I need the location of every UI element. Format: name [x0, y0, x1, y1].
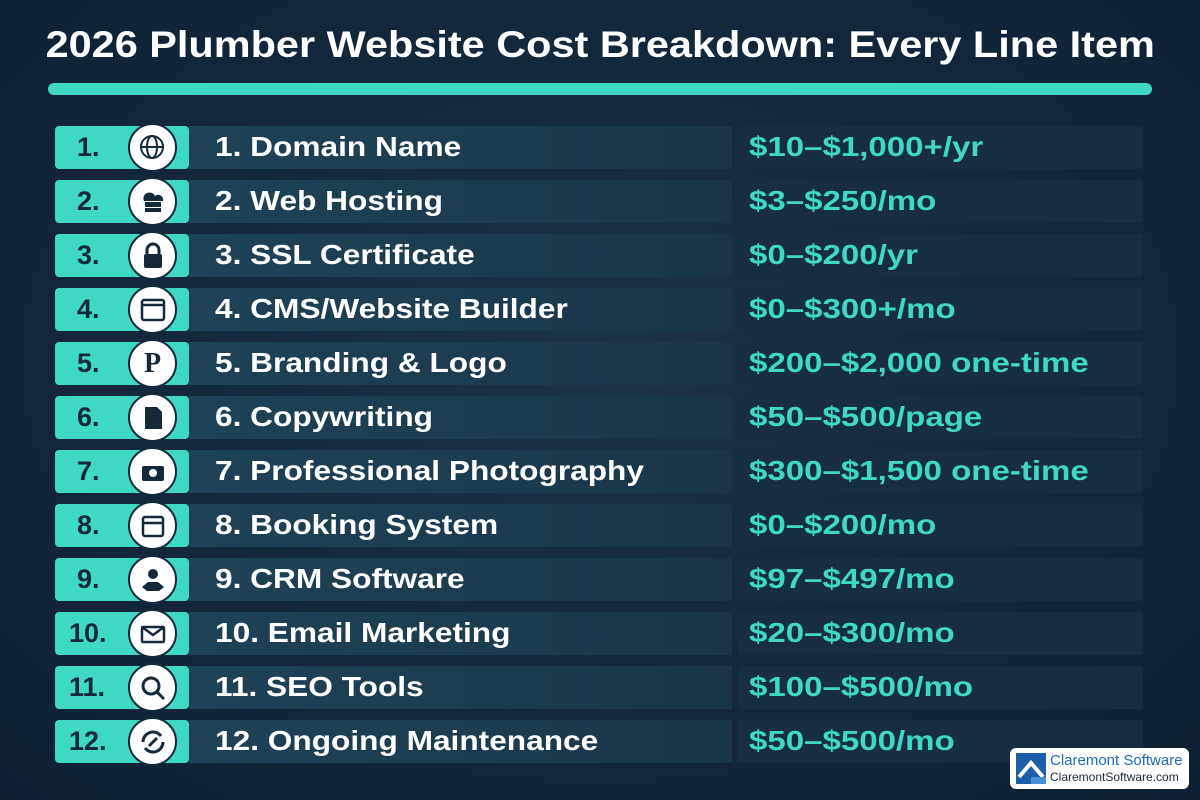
row 8: 8.: [77, 510, 100, 540]
row 10: $20–$300/mo: [749, 617, 955, 648]
row 12: [55, 719, 1143, 764]
row 7: 7. Professional Photography: [215, 455, 644, 486]
row 9: 9. CRM Software: [215, 563, 465, 594]
row 8: [55, 503, 1143, 548]
row 4: [55, 287, 1143, 332]
row 6: $50–$500/page: [749, 401, 982, 432]
row 10: [55, 611, 1143, 656]
row 7: $300–$1,500 one-time: [749, 455, 1089, 486]
title: 2026 Plumber Website Cost Breakdown: Every Line Item: [45, 24, 1155, 65]
icon: P logo: [128, 339, 177, 388]
icon: calendar: [128, 501, 177, 550]
row 1: $10–$1,000+/yr: [749, 131, 983, 162]
row 10: 10. Email Marketing: [215, 617, 510, 648]
icon: P logo: P: [144, 348, 161, 378]
row 2: [55, 179, 1143, 224]
row 2: 2. Web Hosting: [215, 185, 443, 216]
row 9: 9.: [77, 564, 100, 594]
row 9: $97–$497/mo: [749, 563, 955, 594]
icon: magnifier: [128, 663, 177, 712]
row 3: 3.: [77, 240, 100, 270]
icon: lock: [128, 231, 177, 280]
row 11: $100–$500/mo: [749, 671, 973, 702]
row 11: [55, 665, 1143, 710]
row 4: 4.: [77, 294, 100, 324]
row 8: 8. Booking System: [215, 509, 498, 540]
row 5: 5.: [77, 348, 100, 378]
icon: globe: [128, 123, 177, 172]
logo: Claremont Software: Claremont Software: [1050, 752, 1183, 769]
row 1: [55, 125, 1143, 170]
row 4: $0–$300+/mo: [749, 293, 956, 324]
row 3: [55, 233, 1143, 278]
row 2: $3–$250/mo: [749, 185, 936, 216]
icon: cloud server: [128, 177, 177, 226]
icon: camera: [128, 447, 177, 496]
icon: browser: [128, 285, 177, 334]
row 4: 4. CMS/Website Builder: [215, 293, 568, 324]
row 3: $0–$200/yr: [749, 239, 918, 270]
row 12: 12.: [69, 726, 107, 756]
row 5: $200–$2,000 one-time: [749, 347, 1089, 378]
row 6: 6.: [77, 402, 100, 432]
logo: Claremont Software: [1010, 748, 1189, 789]
icon: handshake: [128, 555, 177, 604]
icon: document: [128, 393, 177, 442]
row 5: [55, 341, 1143, 386]
title underline bar: [48, 83, 1152, 95]
icon: envelope: [128, 609, 177, 658]
row 1: 1. Domain Name: [215, 131, 461, 162]
row 11: 11.: [69, 672, 105, 702]
logo: Claremont Software: ClaremontSoftware.com: [1050, 770, 1179, 784]
row 7: [55, 449, 1143, 494]
row 8: $0–$200/mo: [749, 509, 936, 540]
row 5: 5. Branding & Logo: [215, 347, 507, 378]
icon: wrench cycle: [128, 717, 177, 766]
row 6: [55, 395, 1143, 440]
row 11: 11. SEO Tools: [215, 671, 424, 702]
row 7: 7.: [77, 456, 100, 486]
row 3: 3. SSL Certificate: [215, 239, 475, 270]
row 6: 6. Copywriting: [215, 401, 433, 432]
row 10: 10.: [69, 618, 107, 648]
row 12: $50–$500/mo: [749, 725, 955, 756]
row 2: 2.: [77, 186, 100, 216]
row 12: 12. Ongoing Maintenance: [215, 725, 598, 756]
row 1: 1.: [77, 132, 100, 162]
row 9: [55, 557, 1143, 602]
